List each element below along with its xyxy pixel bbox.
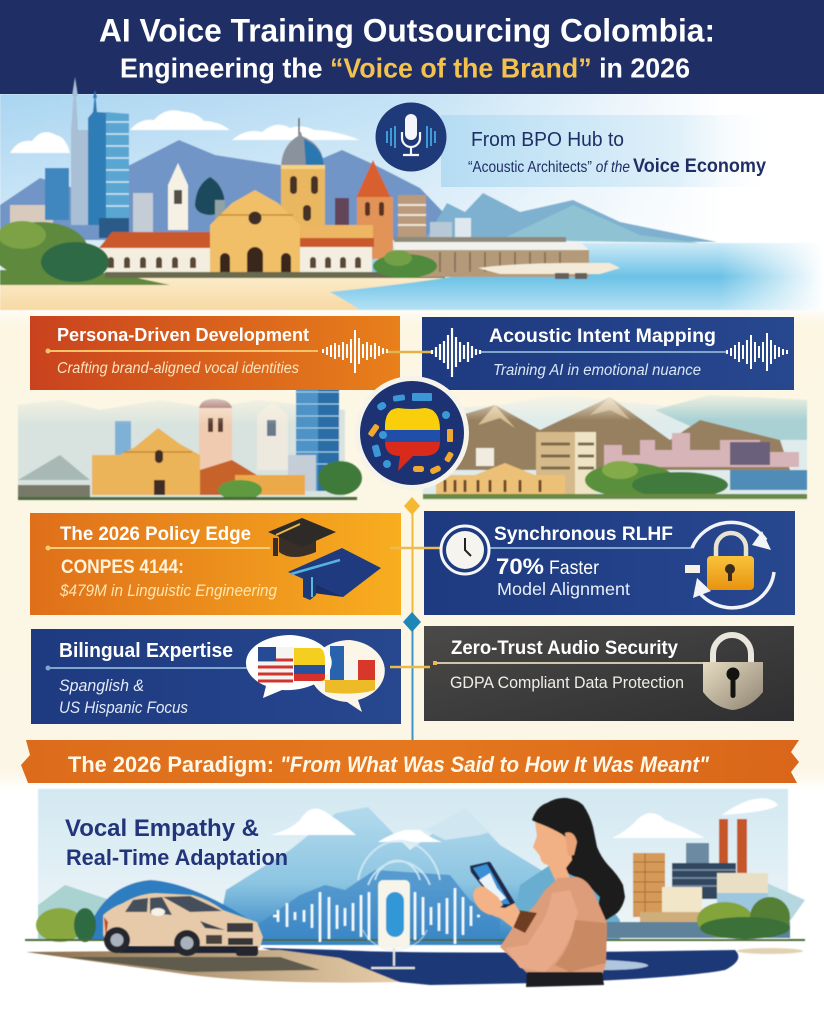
panel: synchronous RLHF: 70% bbox=[496, 554, 544, 579]
phone bbox=[470, 862, 515, 908]
icon: microphone bbox=[376, 102, 446, 172]
long hair bbox=[532, 798, 625, 922]
panel: synchronous RLHF: Model Alignment bbox=[497, 579, 630, 599]
panel: 2026 policy edge: CONPES 4144: bbox=[61, 556, 184, 578]
trees bbox=[0, 221, 437, 282]
center spine line bbox=[412, 500, 414, 740]
factory bbox=[633, 819, 768, 922]
panel: acoustic intent mapping: Training AI in emotional nuance bbox=[493, 362, 701, 379]
icon: Colombia flag speech bubble badge bbox=[355, 376, 469, 490]
tall towers bbox=[71, 77, 129, 238]
road bbox=[262, 948, 738, 985]
panel: synchronous RLHF bbox=[390, 511, 795, 615]
panel: 2026 policy edge bbox=[30, 513, 401, 615]
icon: car bbox=[103, 893, 263, 956]
tower spires overlapping header bbox=[72, 77, 97, 98]
face bbox=[533, 822, 572, 882]
diamond teal bbox=[403, 612, 421, 632]
panel: persona-driven development: Persona-Driven Development bbox=[57, 324, 309, 345]
icon: flag speech bubbles bbox=[246, 635, 385, 712]
harbor building and pier bbox=[394, 237, 620, 279]
subtitle text: Voice Economy bbox=[633, 156, 766, 177]
panel: bilingual expertise bbox=[31, 629, 401, 724]
sea bbox=[300, 243, 824, 310]
icon: padlock with sync arrows bbox=[685, 522, 774, 608]
middle landscape left bbox=[18, 381, 362, 500]
mountains bbox=[0, 140, 470, 240]
panel: 2026 policy edge: $479M in Linguistic Engineering bbox=[59, 582, 278, 600]
panel: acoustic intent mapping bbox=[388, 317, 794, 390]
panel: zero-trust audio security bbox=[390, 626, 794, 721]
distant buildings bbox=[10, 168, 471, 238]
banner: 2026 paradigm: "From What Was Said to How It Was Meant" bbox=[280, 752, 710, 777]
blouse bbox=[500, 877, 607, 973]
title header: AI Voice Training Outsourcing Colombia: bbox=[99, 12, 715, 48]
subtitle band bbox=[441, 115, 778, 187]
beach bbox=[0, 276, 458, 310]
vocal empathy text bbox=[65, 815, 288, 870]
icon: graduation caps bbox=[268, 518, 381, 600]
vocal empathy text: Real-Time Adaptation bbox=[66, 845, 288, 870]
panel: persona-driven development: Crafting brand-aligned vocal identities bbox=[57, 360, 299, 377]
tan tower bbox=[398, 195, 426, 240]
icon: microphone waveform bbox=[273, 841, 480, 968]
middle landscape right bbox=[423, 395, 807, 500]
subtitle text bbox=[468, 129, 766, 177]
bottom scene: vocal empathy bbox=[25, 789, 805, 987]
title header: Engineering the “Voice of the Brand” in 2026 bbox=[120, 52, 690, 84]
illustration: woman with phone bbox=[470, 798, 625, 987]
panel: acoustic intent mapping: Acoustic Intent Mapping bbox=[489, 326, 716, 347]
clouds and mountains bbox=[38, 885, 150, 940]
panel: persona-driven development bbox=[30, 316, 400, 390]
panel: synchronous RLHF: Synchronous RLHF bbox=[494, 524, 673, 545]
skirt bbox=[526, 972, 604, 987]
hero illustration: Colombian skyline bbox=[0, 77, 824, 310]
arm and hand bbox=[513, 910, 537, 933]
dome bell tower bbox=[281, 118, 325, 226]
panel: zero-trust audio security: Zero-Trust Audio Security bbox=[451, 638, 678, 659]
icon: padlock bbox=[703, 635, 763, 710]
trees bbox=[36, 897, 790, 942]
panel: bilingual expertise: Bilingual Expertise bbox=[59, 640, 233, 662]
panel: 2026 policy edge: The 2026 Policy Edge bbox=[60, 524, 251, 545]
subtitle text: From BPO Hub to bbox=[471, 129, 624, 151]
icon: clock bbox=[441, 526, 489, 574]
title header bbox=[0, 0, 824, 94]
vocal empathy text: Vocal Empathy & bbox=[65, 815, 259, 842]
banner: 2026 paradigm bbox=[21, 740, 799, 783]
clouds bbox=[10, 110, 360, 153]
side colonial buildings bbox=[99, 225, 374, 273]
cathedral facade bbox=[105, 190, 445, 278]
panel: zero-trust audio security: GDPA Compliant Data Protection bbox=[450, 674, 684, 692]
banner: 2026 paradigm: The 2026 Paradigm: bbox=[68, 752, 274, 777]
subtitle text: “Acoustic Architects” of the bbox=[468, 159, 630, 176]
red spire tower bbox=[356, 160, 393, 259]
panel: bilingual expertise: Spanglish & bbox=[59, 676, 144, 695]
diamond gold bbox=[404, 497, 420, 515]
panel: bilingual expertise: US Hispanic Focus bbox=[59, 698, 188, 717]
panel: synchronous RLHF: Faster bbox=[549, 558, 600, 579]
white tower and dark dome bbox=[168, 163, 225, 230]
